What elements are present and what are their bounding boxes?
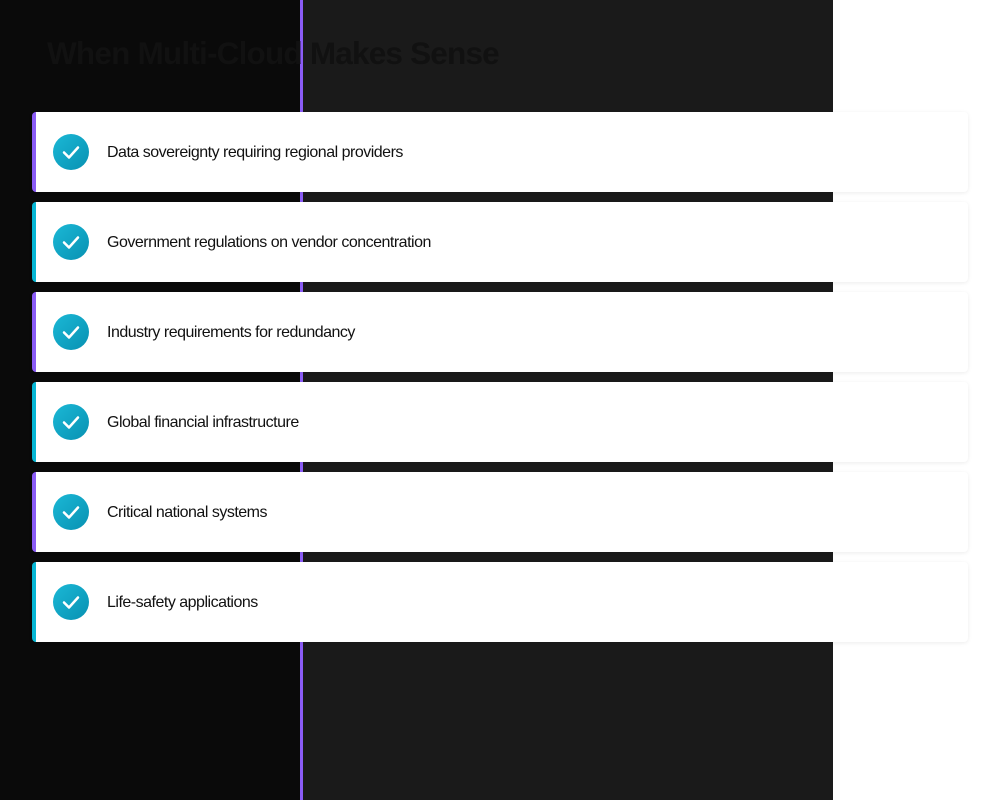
card: data sovereignty <box>32 112 968 192</box>
icon: check <box>53 404 89 440</box>
text: Government regulations on vendor concentration <box>107 234 431 251</box>
card: life-safety <box>32 562 968 642</box>
card: industry requirements <box>32 292 968 372</box>
title: When Multi-Cloud Makes Sense <box>47 35 499 71</box>
text: Critical national systems <box>107 504 267 521</box>
card: global financial <box>32 382 968 462</box>
card: critical national <box>32 472 968 552</box>
icon: check <box>53 134 89 170</box>
text: Data sovereignty requiring regional providers <box>107 144 403 161</box>
icon: check <box>53 314 89 350</box>
text: Life-safety applications <box>107 594 258 611</box>
card: government regulations <box>32 202 968 282</box>
icon: check <box>53 494 89 530</box>
text: Global financial infrastructure <box>107 414 299 431</box>
icon: check <box>53 224 89 260</box>
text: Industry requirements for redundancy <box>107 324 355 341</box>
icon: check <box>53 584 89 620</box>
